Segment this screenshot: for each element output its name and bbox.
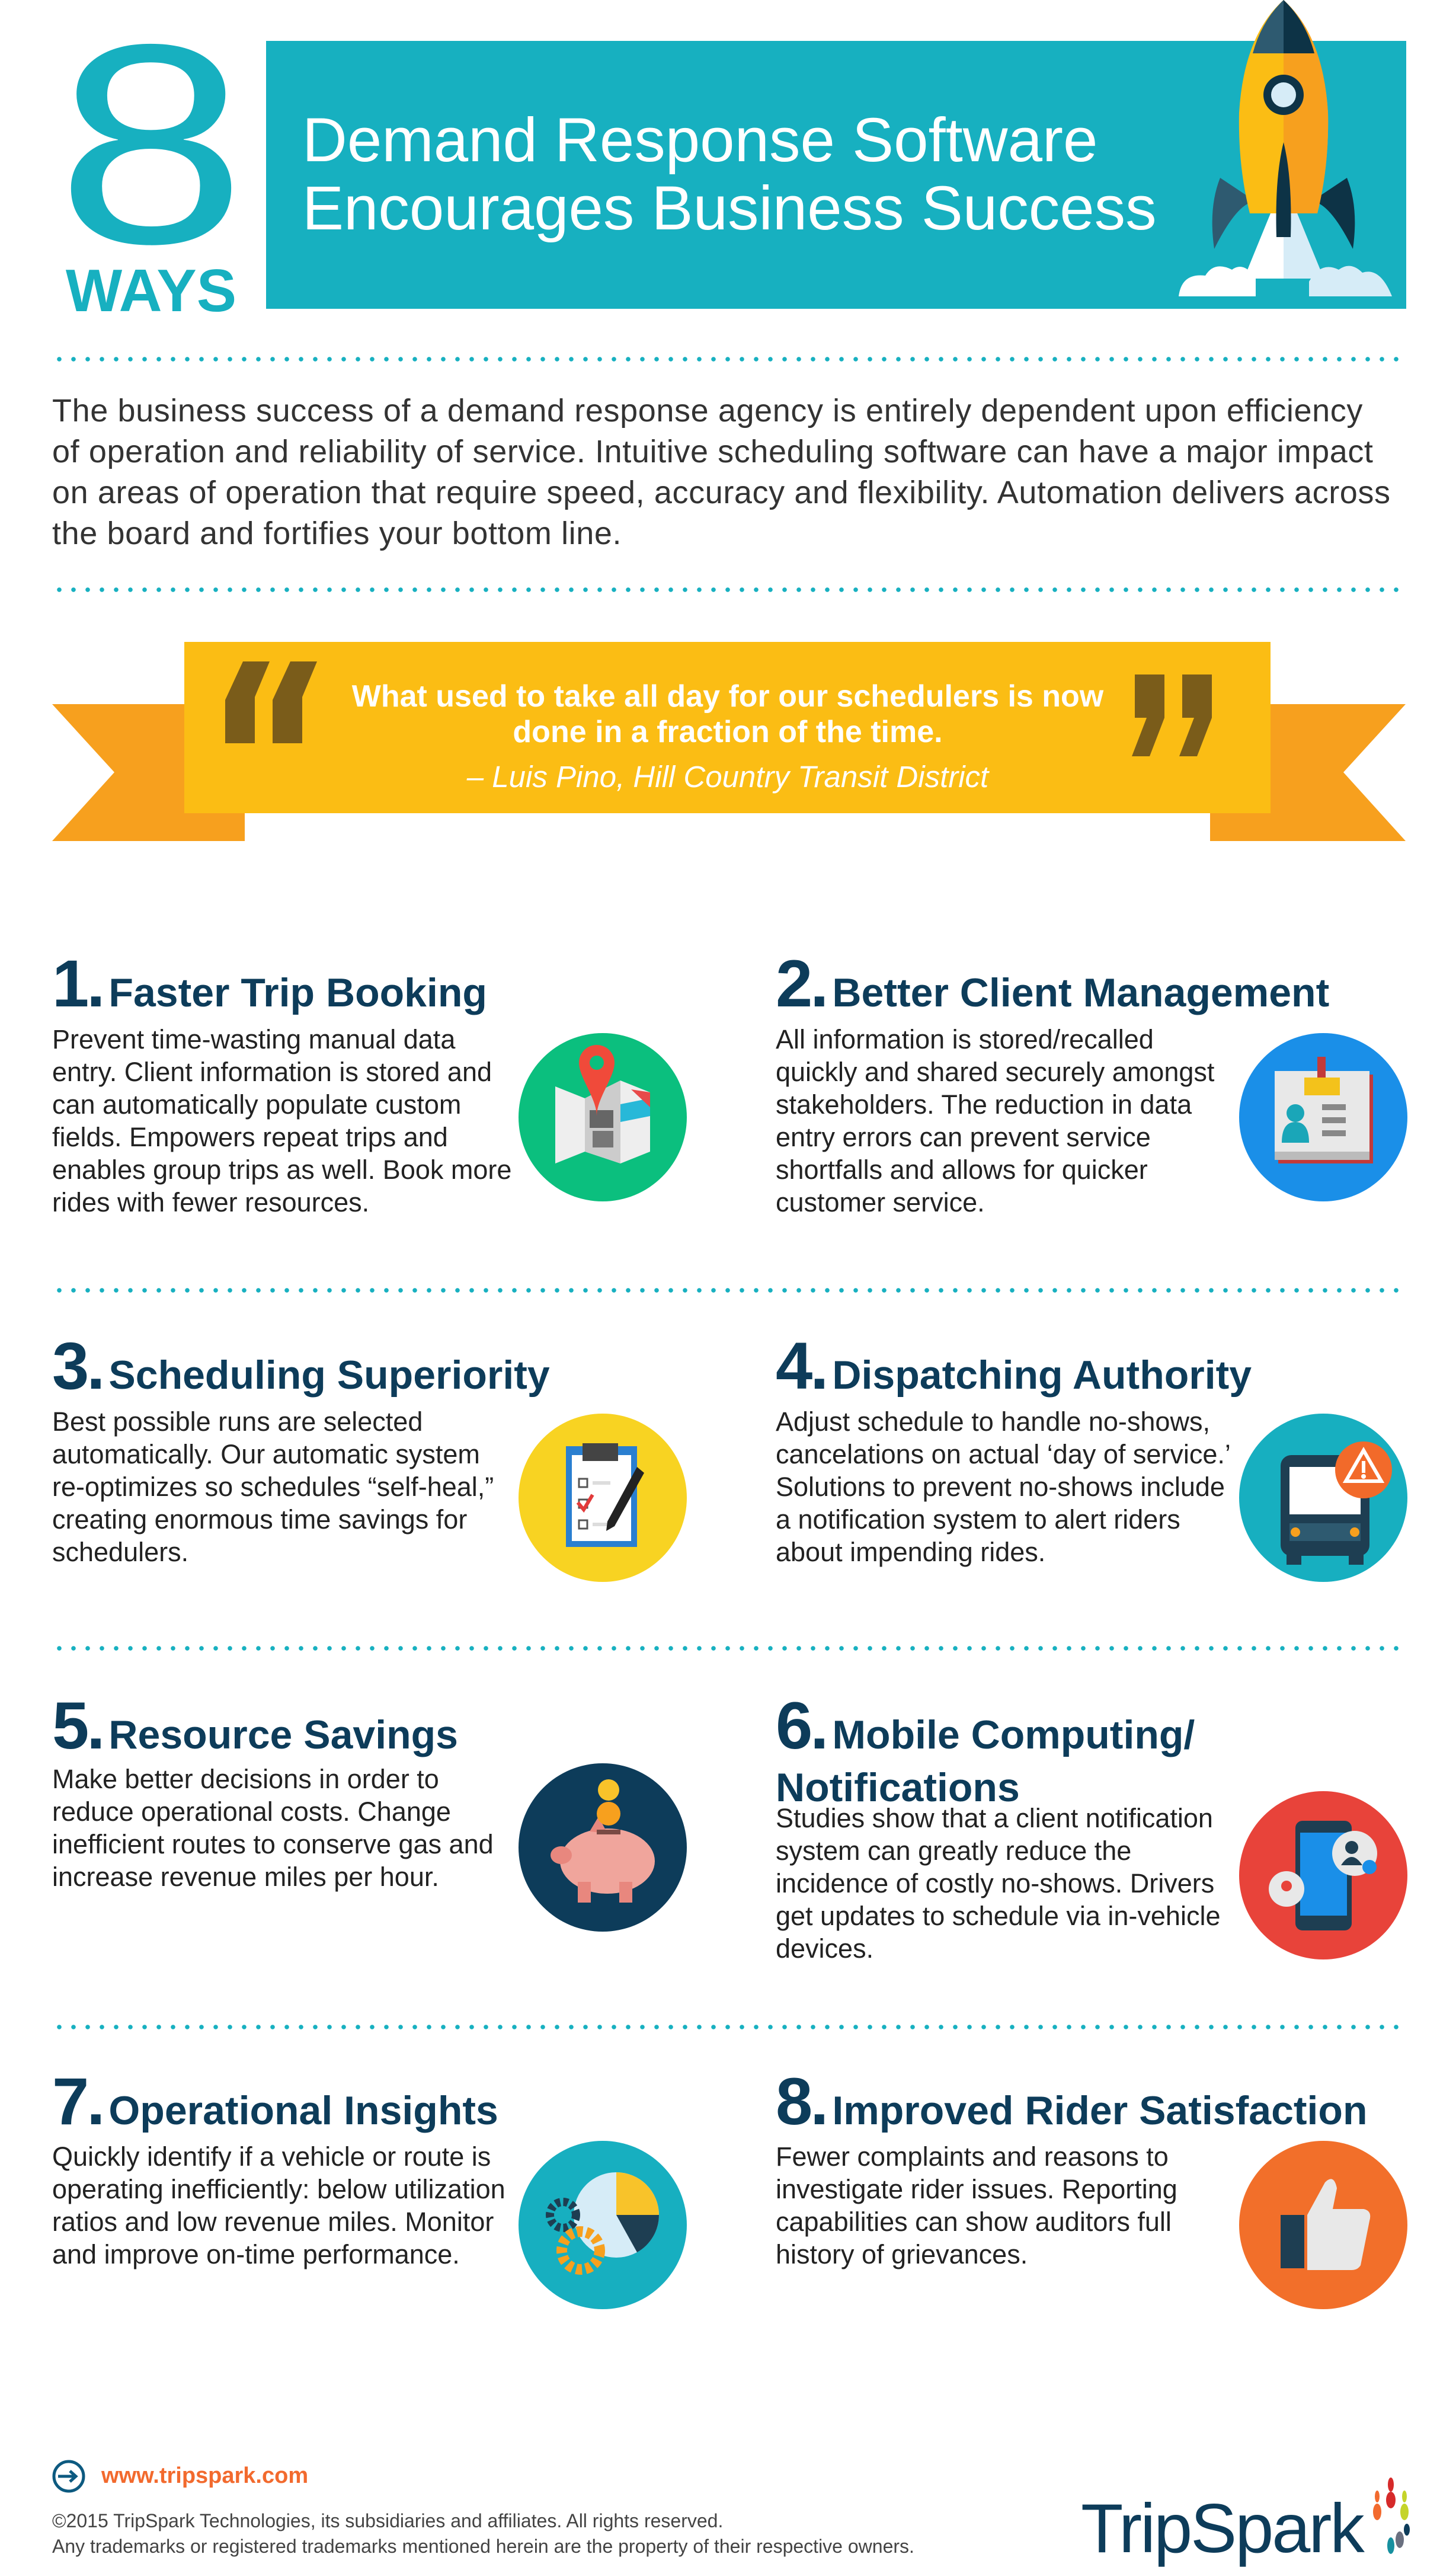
quote text bbox=[352, 679, 1103, 749]
intro paragraph: the board and fortifies your bottom line. bbox=[52, 516, 622, 551]
text 3: creating enormous time savings for bbox=[52, 1504, 467, 1535]
section 5 bbox=[52, 1689, 687, 1932]
heading 6: 6.Mobile Computing/ bbox=[776, 1689, 1195, 1763]
intro paragraph bbox=[52, 393, 1391, 551]
text 5: inefficient routes to conserve gas and bbox=[52, 1829, 494, 1859]
text 7: operating inefficiently: below utilization bbox=[52, 2174, 505, 2204]
text 2: entry errors can prevent service bbox=[776, 1122, 1151, 1152]
text 5 bbox=[52, 1764, 494, 1892]
text 5: reduce operational costs. Change bbox=[52, 1796, 451, 1827]
heading 7: 7.Operational Insights bbox=[52, 2064, 498, 2138]
text 6: Studies show that a client notification bbox=[776, 1803, 1213, 1833]
title banner bbox=[266, 41, 1406, 309]
text 3 bbox=[52, 1406, 494, 1567]
text 6 bbox=[776, 1803, 1220, 1964]
text 5: increase revenue miles per hour. bbox=[52, 1862, 439, 1892]
text 1: fields. Empowers repeat trips and bbox=[52, 1122, 448, 1152]
text 4: Solutions to prevent no-shows include bbox=[776, 1472, 1225, 1502]
text 7 bbox=[52, 2141, 505, 2269]
text 1: enables group trips as well. Book more bbox=[52, 1155, 511, 1185]
section 4 bbox=[776, 1329, 1407, 1582]
title text: Encourages Business Success bbox=[302, 174, 1157, 243]
logo: TripSpark bbox=[1081, 2478, 1425, 2561]
heading 2: 2.Better Client Management bbox=[776, 947, 1329, 1021]
intro paragraph: The business success of a demand response agency is entirely dependent upon efficiency bbox=[52, 393, 1363, 429]
text 2: quickly and shared securely amongst bbox=[776, 1057, 1214, 1087]
text 5: Make better decisions in order to bbox=[52, 1764, 439, 1794]
text 8 bbox=[776, 2140, 1177, 2271]
quote text: What used to take all day for our schedulers is now bbox=[352, 679, 1103, 714]
icon: map pin bbox=[519, 1033, 687, 1201]
icon: rocket bbox=[1179, 0, 1392, 296]
text 8: investigate rider issues. Reporting bbox=[776, 2174, 1177, 2204]
icon: piggy bank bbox=[519, 1763, 687, 1932]
text 4: cancelations on actual ‘day of service.’ bbox=[776, 1439, 1231, 1469]
section 7 bbox=[52, 2064, 687, 2309]
text 6: system can greatly reduce the bbox=[776, 1836, 1131, 1866]
text 1: can automatically populate custom bbox=[52, 1089, 461, 1120]
logo: TripSpark: TripSpark bbox=[1081, 2489, 1363, 2567]
copyright text: ©2015 TripSpark Technologies, its subsidiaries and affiliates. All rights reserved. bbox=[52, 2510, 723, 2531]
intro paragraph: of operation and reliability of service. Intuitive scheduling software can have a major impact bbox=[52, 434, 1374, 469]
text 7: and improve on-time performance. bbox=[52, 2239, 460, 2269]
icon: id card bbox=[1239, 1033, 1407, 1201]
text 2: All information is stored/recalled bbox=[776, 1024, 1154, 1054]
attribution: – Luis Pino, Hill Country Transit District bbox=[467, 760, 988, 794]
text 3: schedulers. bbox=[52, 1537, 188, 1567]
text 1: Prevent time-wasting manual data bbox=[52, 1024, 455, 1054]
footer: website link bbox=[52, 2459, 348, 2494]
title text: Demand Response Software bbox=[302, 106, 1097, 175]
icon: thumbs up bbox=[1239, 2141, 1407, 2309]
text 3: automatically. Our automatic system bbox=[52, 1439, 480, 1469]
text 4: about impending rides. bbox=[776, 1537, 1045, 1567]
copyright text: Any trademarks or registered trademarks mentioned herein are the property of their respective owners. bbox=[52, 2536, 914, 2557]
text 8: history of grievances. bbox=[776, 2239, 1028, 2269]
text 2: stakeholders. The reduction in data bbox=[776, 1089, 1192, 1120]
text 2: shortfalls and allows for quicker bbox=[776, 1155, 1148, 1185]
text 8: capabilities can show auditors full bbox=[776, 2207, 1172, 2237]
text 7: ratios and low revenue miles. Monitor bbox=[52, 2207, 494, 2237]
text 1: rides with fewer resources. bbox=[52, 1187, 369, 1217]
section 8 bbox=[776, 2064, 1407, 2309]
ribbon tails bbox=[52, 642, 1406, 841]
text 8: Fewer complaints and reasons to bbox=[776, 2141, 1169, 2172]
icon: gears and pie chart bbox=[519, 2141, 687, 2309]
text 3: re-optimizes so schedules “self-heal,” bbox=[52, 1472, 494, 1502]
text 6: incidence of costly no-shows. Drivers bbox=[776, 1868, 1214, 1898]
text 6: get updates to schedule via in-vehicle bbox=[776, 1901, 1220, 1931]
icon: clipboard bbox=[519, 1414, 687, 1582]
heading 8: 8.Improved Rider Satisfaction bbox=[776, 2064, 1368, 2138]
text 2 bbox=[776, 1024, 1215, 1217]
WAYS label: WAYS bbox=[66, 258, 236, 324]
text 7: Quickly identify if a vehicle or route is bbox=[52, 2141, 491, 2172]
text 4: a notification system to alert riders bbox=[776, 1504, 1180, 1535]
text 4: Adjust schedule to handle no-shows, bbox=[776, 1406, 1210, 1437]
section 3 bbox=[52, 1329, 687, 1582]
intro paragraph: on areas of operation that require speed, accuracy and flexibility. Automation delivers across bbox=[52, 475, 1391, 510]
text 3: Best possible runs are selected bbox=[52, 1406, 423, 1437]
text 2: customer service. bbox=[776, 1187, 985, 1217]
icon: arrow circle bbox=[52, 2460, 85, 2493]
quote text: done in a fraction of the time. bbox=[513, 715, 943, 749]
section 1 bbox=[52, 947, 687, 1217]
text 1 bbox=[52, 1024, 511, 1217]
heading 6 second line: Notifications bbox=[776, 1765, 1020, 1810]
heading 4: 4.Dispatching Authority bbox=[776, 1329, 1252, 1403]
heading 3: 3.Scheduling Superiority bbox=[52, 1329, 550, 1403]
title text bbox=[302, 106, 1157, 243]
copyright text bbox=[52, 2508, 914, 2559]
quote ribbon bbox=[52, 642, 1406, 841]
text 6: devices. bbox=[776, 1933, 873, 1964]
icon: phone notifications bbox=[1239, 1791, 1407, 1959]
section 6 bbox=[776, 1689, 1407, 1964]
section 2 bbox=[776, 947, 1407, 1217]
footer: website link: www.tripspark.com bbox=[101, 2463, 308, 2488]
quote marks bbox=[225, 661, 1212, 756]
heading 5: 5.Resource Savings bbox=[52, 1689, 458, 1763]
text 1: entry. Client information is stored and bbox=[52, 1057, 492, 1087]
icon: bus alert bbox=[1239, 1414, 1407, 1582]
heading 1: 1.Faster Trip Booking bbox=[52, 947, 487, 1021]
text 4 bbox=[776, 1406, 1231, 1567]
